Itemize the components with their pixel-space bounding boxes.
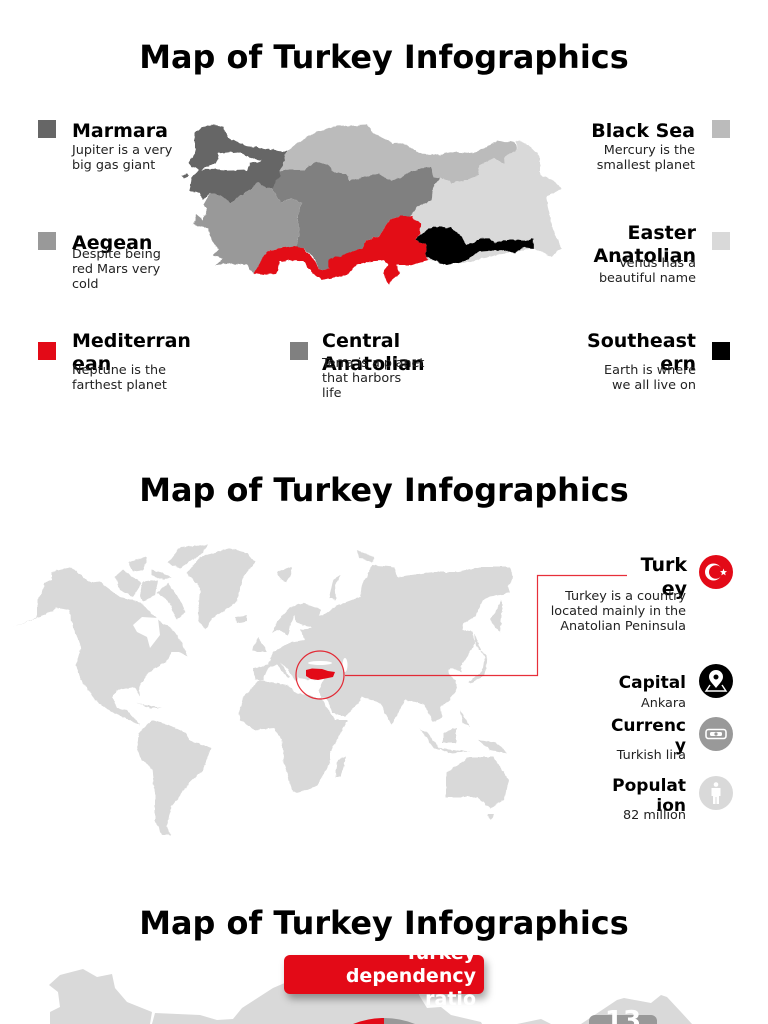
continents bbox=[13, 545, 513, 835]
region: Mediterranean bbox=[253, 216, 428, 285]
legend: Marmara: big gas giant bbox=[72, 158, 155, 172]
callout: Turkey dependency ratio: dependency bbox=[346, 965, 476, 987]
legend: Eastern Anatolian: Anatolian bbox=[593, 245, 696, 267]
legend: Black Sea: smallest planet bbox=[597, 158, 695, 172]
region: Aegean bbox=[193, 182, 302, 273]
region: Marmara bbox=[182, 125, 287, 203]
icon: map pin bbox=[699, 664, 733, 698]
legend: Marmara: Marmara bbox=[72, 120, 168, 142]
info: Turkey: Anatolian Peninsula bbox=[560, 619, 686, 634]
legend: Southeastern: Earth is where bbox=[604, 363, 696, 378]
text: ratio bbox=[425, 988, 476, 1010]
region: Eastern Anatolian bbox=[410, 140, 562, 263]
inland seas bbox=[133, 617, 348, 672]
info: Currency: y bbox=[675, 736, 686, 756]
legend: Central Anatolian: Terra is a planet bbox=[322, 356, 424, 371]
legend: Aegean: red Mars very bbox=[72, 262, 160, 277]
legend: Aegean bbox=[38, 232, 161, 292]
map: Turkey regions bbox=[181, 124, 562, 284]
legend: Eastern Anatolian: beautiful name bbox=[599, 271, 696, 286]
info: Population: Populat bbox=[612, 776, 686, 796]
title: section 1: Map of Turkey Infographics bbox=[139, 38, 629, 76]
info: Capital: Capital bbox=[619, 673, 686, 693]
legend: Mediterranean: Neptune is the bbox=[72, 363, 166, 378]
legend: Mediterranean: Mediterran bbox=[72, 330, 191, 352]
legend: Southeastern: ern bbox=[660, 353, 696, 375]
legend: Aegean: cold bbox=[72, 277, 99, 292]
legend: Black Sea: Black Sea bbox=[591, 120, 695, 142]
legend: Marmara: Jupiter is a very bbox=[72, 142, 172, 158]
legend: Southeastern bbox=[587, 330, 730, 393]
legend: Mediterranean bbox=[38, 330, 191, 393]
region: Southeastern bbox=[415, 227, 533, 265]
legend: Aegean: Despite being bbox=[72, 247, 161, 262]
info: Capital: Ankara bbox=[641, 696, 686, 711]
callout: Turkey dependency ratio bbox=[284, 955, 484, 994]
legend: Black Sea bbox=[591, 120, 730, 172]
legend: Marmara bbox=[38, 120, 172, 172]
info: Currency bbox=[611, 716, 733, 763]
info: Turkey: ey bbox=[662, 578, 687, 600]
label: 13 bbox=[589, 1015, 657, 1024]
info: Currency: Currenc bbox=[611, 716, 686, 736]
legend: Central Anatolian: life bbox=[322, 386, 342, 401]
callout: circle and leader line bbox=[296, 576, 627, 699]
region: Black Sea bbox=[279, 125, 517, 183]
icon: person bbox=[699, 776, 733, 810]
legend: Central Anatolian: Anatolian bbox=[322, 353, 425, 375]
info: Turkey: Turk bbox=[641, 554, 687, 576]
legend: Mediterranean: farthest planet bbox=[72, 378, 167, 393]
info: Population bbox=[612, 776, 733, 823]
legend: Southeastern: we all live on bbox=[612, 378, 696, 393]
legend: Southeastern: Southeast bbox=[587, 330, 696, 352]
info: Turkey: located mainly in the bbox=[551, 604, 686, 619]
legend: Central Anatolian: that harbors bbox=[322, 371, 401, 386]
info: Population: ion bbox=[656, 796, 686, 816]
title: section 2: Map of Turkey Infographics bbox=[139, 471, 629, 509]
legend: Aegean: Aegean bbox=[72, 232, 152, 254]
info: Capital bbox=[619, 664, 733, 711]
info: Currency: Turkish lira bbox=[617, 748, 686, 763]
legend: Mediterranean: ean bbox=[72, 353, 111, 375]
text: Turkey bbox=[405, 942, 476, 964]
legend: Eastern Anatolian: Venus has a bbox=[619, 256, 696, 271]
legend: Black Sea: Mercury is the bbox=[604, 142, 695, 158]
icon: banknote bbox=[699, 717, 733, 751]
icon: Turkish flag bbox=[699, 555, 733, 589]
info: Population: 82 million bbox=[623, 808, 686, 823]
legend: Eastern Anatolian: Easter bbox=[628, 222, 696, 244]
info: Turkey: Turkey is a country bbox=[565, 589, 686, 604]
legend: Central Anatolian bbox=[290, 330, 425, 401]
Turkey highlight bbox=[306, 668, 335, 680]
title: section 3: Map of Turkey Infographics bbox=[139, 904, 629, 942]
region: Central Anatolian bbox=[272, 162, 441, 270]
legend: Central Anatolian: Central bbox=[322, 330, 400, 352]
info: Turkey bbox=[551, 554, 733, 634]
legend: Eastern Anatolian bbox=[593, 222, 730, 286]
